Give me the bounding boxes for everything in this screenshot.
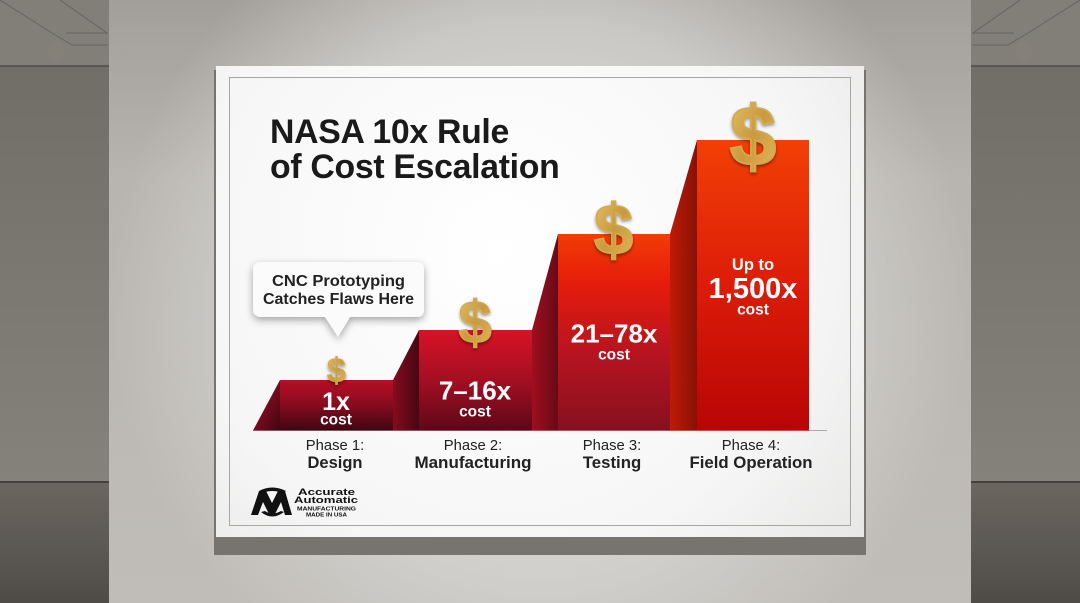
icon: dollar phase 2: $ <box>458 289 492 356</box>
callout: Catches Flaws Here <box>263 291 414 308</box>
label: phase 2 <box>414 438 532 472</box>
logo text: Accurate <box>298 487 355 498</box>
bar: phase 4 <box>670 140 809 430</box>
label: phase 4: Phase 4: <box>722 438 780 454</box>
label: phase 1 <box>306 438 364 472</box>
bar: phase 1: 1x <box>322 388 350 416</box>
baseline <box>253 430 827 431</box>
logo text <box>294 487 358 518</box>
bar: phase 1 <box>253 380 393 430</box>
label: phase 2: Phase 2: <box>444 438 502 454</box>
bar: phase 4: cost <box>737 302 769 318</box>
title: of Cost Escalation <box>270 148 559 186</box>
bar: phase 3: cost <box>598 346 630 364</box>
poster panel <box>216 66 864 537</box>
bar: phase 2: 7–16x <box>439 376 512 406</box>
logo text: MADE IN USA <box>306 512 347 518</box>
bar: phase 3 <box>532 234 670 430</box>
label: phase 1: Design <box>307 454 363 472</box>
title: NASA 10x Rule <box>270 113 509 151</box>
bar: phase 2: cost <box>459 404 491 420</box>
panel shadow <box>214 70 866 555</box>
icon: logo mark <box>251 488 292 516</box>
logo <box>251 487 358 518</box>
bar: phase 4: 1,500x <box>709 273 797 305</box>
logo text: Automatic <box>294 495 358 506</box>
label: phase 3: Phase 3: <box>583 438 641 454</box>
label: phase 3 <box>583 438 641 472</box>
label: phase 2: Manufacturing <box>414 453 532 472</box>
logo text: MANUFACTURING <box>297 506 356 512</box>
label: phase 3: Testing <box>583 453 641 472</box>
bar: phase 3: 21–78x <box>571 318 658 348</box>
icon: dollar phase 1: $ <box>327 352 346 390</box>
bar: phase 1: cost <box>320 412 352 428</box>
label: phase 4: Field Operation <box>689 453 813 472</box>
bar: phase 4: Up to <box>732 256 774 274</box>
icon: dollar phase 3: $ <box>594 191 633 270</box>
callout: CNC Prototyping <box>272 273 405 290</box>
icon: dollar phase 4: $ <box>730 89 776 183</box>
label: phase 1: Phase 1: <box>306 438 364 454</box>
callout <box>253 262 424 337</box>
bar: phase 2 <box>393 330 532 430</box>
label: phase 4 <box>689 438 813 472</box>
